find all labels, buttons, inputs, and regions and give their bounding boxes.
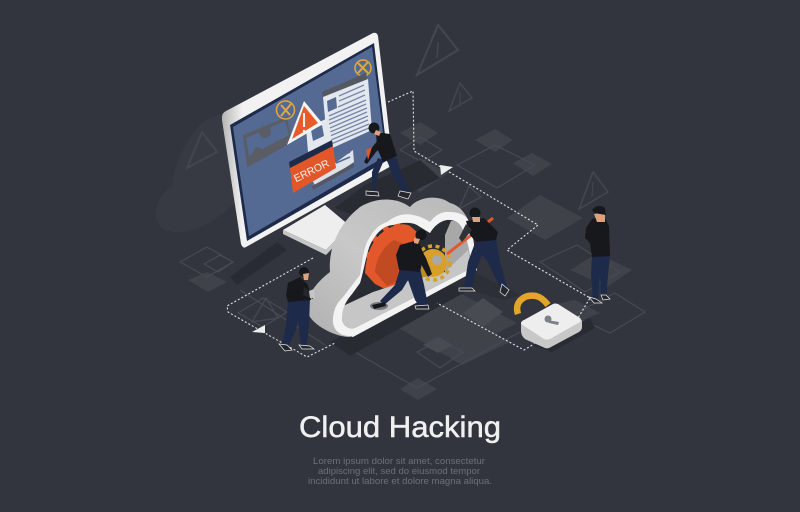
opening back wall <box>342 220 472 328</box>
arrowheads on dashed lines <box>252 165 453 333</box>
screen <box>233 47 386 236</box>
keyhole <box>544 316 559 325</box>
close icon left <box>276 101 294 119</box>
grey inner wall <box>445 221 472 282</box>
orange gear <box>365 222 417 290</box>
lower window <box>312 150 354 190</box>
isometric floor tiles, outlined <box>180 137 645 388</box>
monitor stand <box>283 205 350 255</box>
hacker at monitor <box>364 122 411 199</box>
cloud with opening <box>308 198 477 337</box>
standing hacker <box>585 206 610 303</box>
lock body <box>521 320 582 348</box>
description text <box>308 456 492 487</box>
small window behind warning <box>306 118 332 152</box>
cloud front rim <box>333 212 477 337</box>
description text: Lorem ipsum dolor sit amet, consectetur <box>313 456 485 467</box>
document window <box>322 73 372 150</box>
error label: ERROR <box>292 157 332 185</box>
lock shackle <box>517 296 548 314</box>
hacker with crowbar <box>459 208 509 296</box>
image window <box>243 117 292 167</box>
background cloud silhouette <box>156 112 285 232</box>
hacker with device <box>279 267 315 351</box>
monitor <box>222 33 393 248</box>
hacker in cloud <box>370 230 432 310</box>
orange crowbar <box>447 218 493 254</box>
error banner <box>289 140 336 193</box>
screen border <box>230 43 388 241</box>
faint warning triangles <box>252 25 608 322</box>
dashed connection lines <box>227 91 590 357</box>
close icon right <box>355 60 371 76</box>
yellow gear <box>416 246 450 280</box>
monitor frame <box>222 33 393 248</box>
padlock <box>517 296 595 352</box>
lock shadow <box>532 318 595 352</box>
cloud extrusion <box>308 198 477 337</box>
title: Cloud Hacking <box>299 411 501 444</box>
warning triangle <box>287 101 323 145</box>
description text: incididunt ut labore et dolore magna aliqua. <box>308 476 492 487</box>
monitor and cloud cast shadows <box>230 160 520 356</box>
isometric floor tiles, filled <box>188 122 632 400</box>
opening floor <box>342 250 472 328</box>
description text: adipiscing elit, sed do eiusmod tempor <box>318 466 480 477</box>
